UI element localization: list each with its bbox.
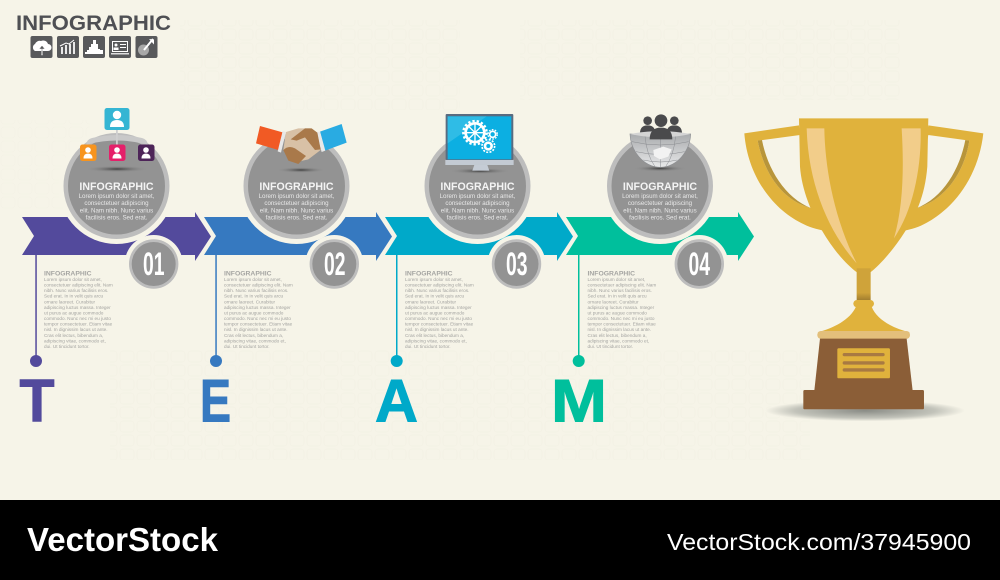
text block 3: adipiscing luctus massa. Integer <box>405 305 472 310</box>
panel: step 3 circle: consectetuer adipiscing <box>445 200 510 207</box>
text block 4: Cras elit lectus, bibendum a, <box>588 333 647 338</box>
text block 1: nisl. In dignissim lacus ut ante. <box>44 327 108 332</box>
text block 4: tempor consectetuer. Etiam vitae <box>588 322 656 327</box>
panel: step 2 circle: consectetuer adipiscing <box>264 200 329 207</box>
name plate <box>837 348 890 378</box>
trophy stem <box>857 268 871 301</box>
text block 2: Sed erat. In in velit quis arcu <box>224 294 284 299</box>
text block 1: nibh. Nunc varius facilisis eros. <box>44 288 108 293</box>
text block 3: Cras elit lectus, bibendum a, <box>405 333 464 338</box>
arrow 3 cyan <box>385 212 573 261</box>
number badge 04 <box>670 235 728 293</box>
text block 2: nibh. Nunc varius facilisis eros. <box>224 288 288 293</box>
number badge 01: 01 <box>143 246 164 282</box>
panel: step 1 circle: elit. Nam nibh. Nunc varius <box>80 208 153 214</box>
panel: step 4 circle: consectetuer adipiscing <box>628 200 693 207</box>
text block 4: adipiscing vitae, commodo et, <box>588 338 649 343</box>
text block 4: Lorem ipsum dolor sit amet, <box>588 277 645 282</box>
panel: step 2 circle: Lorem ipsum dolor sit amet, <box>259 193 335 200</box>
text block 2: INFOGRAPHIC <box>224 270 272 278</box>
arrow 1 purple <box>22 212 211 261</box>
footer bar <box>0 500 1000 580</box>
text block 2: Cras elit lectus, bibendum a, <box>224 333 283 338</box>
text block 4: dui. Ut tincidunt tortor. <box>588 344 633 349</box>
panel: step 2 circle: facilisis eros. Sed erat. <box>266 214 328 222</box>
trophy handles <box>744 125 983 231</box>
panel: step 3 circle: INFOGRAPHIC <box>440 181 515 193</box>
panel: step 1 circle: facilisis eros. Sed erat. <box>86 214 148 222</box>
text block 2: dui. Ut tincidunt tortor. <box>224 344 270 349</box>
panel: step 4 circle: INFOGRAPHIC <box>623 181 697 193</box>
text block 4: commodo. Nunc nec mi eu justo <box>588 316 655 321</box>
text block 2: commodo. Nunc nec mi eu justo <box>224 316 291 321</box>
arrow 4 teal <box>566 212 754 261</box>
connector line and dot 2 <box>210 255 222 367</box>
number badge 02: 02 <box>324 246 346 282</box>
text block 3: Sed erat. In in velit quis arcu <box>405 294 465 299</box>
panel: step 4 circle <box>602 128 718 244</box>
icon: presentation board <box>109 36 131 58</box>
icon: monitor with gears <box>445 114 514 171</box>
text block 1: ut purus ac augue commodo <box>44 310 104 315</box>
text block 3: dui. Ut tincidunt tortor. <box>405 344 451 349</box>
number badge 03 <box>488 235 546 293</box>
text block 4 <box>588 270 656 349</box>
header icon row <box>30 36 158 58</box>
trophy plinth <box>814 339 913 391</box>
cup highlights <box>807 128 921 263</box>
letter T: T <box>20 368 54 434</box>
panel: step 2 circle: elit. Nam nibh. Nunc varius <box>260 208 333 214</box>
text block 4: ut purus ac augue commodo <box>588 310 647 315</box>
text block 1: dui. Ut tincidunt tortor. <box>44 344 90 349</box>
text block 3 <box>405 270 474 349</box>
text block 1: Sed erat. In in velit quis arcu <box>44 294 104 299</box>
panel: step 2 circle <box>238 128 354 244</box>
text block 1: Cras elit lectus, bibendum a, <box>44 333 103 338</box>
number badge 02 <box>305 235 363 293</box>
connector line and dot 4 <box>573 255 585 367</box>
icon: bar chart <box>83 36 105 58</box>
footer url: VectorStock.com/37945900 <box>667 529 971 555</box>
panel: step 3 circle <box>420 128 536 244</box>
text block 4: nibh. Nunc varius facilisis eros. <box>588 288 652 293</box>
connector line and dot 3 <box>391 255 403 367</box>
panel: step 2 circle: INFOGRAPHIC <box>259 181 334 193</box>
text block 4: consectetuer adipiscing elit. Nam <box>588 283 656 288</box>
text block 3: INFOGRAPHIC <box>405 270 453 278</box>
text block 4: adipiscing luctus massa. Integer <box>588 305 655 310</box>
text block 1: commodo. Nunc nec mi eu justo <box>44 316 111 321</box>
text block 2: tempor consectetuer. Etiam vitae <box>224 322 293 327</box>
trophy foot <box>817 307 910 332</box>
text block 2: nisl. In dignissim lacus ut ante. <box>224 327 288 332</box>
text block 3: Lorem ipsum dolor sit amet, <box>405 277 463 282</box>
trophy shadow <box>765 400 965 421</box>
text block 1: adipiscing vitae, commodo et, <box>44 338 106 343</box>
text block 1: Lorem ipsum dolor sit amet, <box>44 277 102 282</box>
panel: step 1 circle: Lorem ipsum dolor sit amet, <box>79 193 155 200</box>
panel: step 3 circle: facilisis eros. Sed erat. <box>447 214 509 222</box>
panel: step 1 circle: INFOGRAPHIC <box>79 181 154 193</box>
text block 3: nisl. In dignissim lacus ut ante. <box>405 327 469 332</box>
letter A: A <box>375 368 418 434</box>
text block 3: ornare laoreet. Curabitur <box>405 299 457 304</box>
text block 1: adipiscing luctus massa. Integer <box>44 305 111 310</box>
icon: cloud upload <box>30 36 52 58</box>
icon: growth bars <box>57 36 79 58</box>
text block 2: consectetuer adipiscing elit. Nam <box>224 283 293 288</box>
trophy cup <box>799 118 928 273</box>
panel: step 4 circle: elit. Nam nibh. Nunc varius <box>623 208 697 214</box>
number badge 03: 03 <box>506 246 528 282</box>
number badge 04: 04 <box>688 246 710 282</box>
text block 1 <box>44 270 113 349</box>
text block 3: ut purus ac augue commodo <box>405 310 465 315</box>
icon: team on globe bowl <box>630 114 691 167</box>
text block 3: consectetuer adipiscing elit. Nam <box>405 283 474 288</box>
text block 1: ornare laoreet. Curabitur <box>44 299 96 304</box>
icon: handshake <box>256 124 347 164</box>
text block 2: Lorem ipsum dolor sit amet, <box>224 277 282 282</box>
trophy base <box>803 390 924 409</box>
text block 4: ornare laoreet. Curabitur <box>588 299 639 304</box>
letter E: E <box>200 368 231 434</box>
text block 2: adipiscing vitae, commodo et, <box>224 338 286 343</box>
text block 2: ornare laoreet. Curabitur <box>224 299 276 304</box>
text block 1: INFOGRAPHIC <box>44 270 92 278</box>
text block 4: nisl. In dignissim lacus ut ante. <box>588 327 651 332</box>
panel: step 3 circle: elit. Nam nibh. Nunc varius <box>441 208 514 214</box>
panel: step 4 circle: facilisis eros. Sed erat. <box>629 214 691 222</box>
text block 4: INFOGRAPHIC <box>588 270 635 278</box>
panel: step 1 circle: consectetuer adipiscing <box>84 200 149 207</box>
text block 3: adipiscing vitae, commodo et, <box>405 338 467 343</box>
footer logo: VectorStock <box>27 521 219 558</box>
panel: step 1 circle <box>58 128 174 244</box>
letter M: M <box>551 368 607 434</box>
text block 4: Sed erat. In in velit quis arcu <box>588 294 647 299</box>
icon: target <box>136 36 158 58</box>
text block 1: consectetuer adipiscing elit. Nam <box>44 283 113 288</box>
trophy <box>744 118 983 421</box>
text block 3: nibh. Nunc varius facilisis eros. <box>405 288 469 293</box>
text block 3: tempor consectetuer. Etiam vitae <box>405 322 474 327</box>
text block 2: adipiscing luctus massa. Integer <box>224 305 291 310</box>
text block 2 <box>224 270 293 349</box>
panel: step 3 circle: Lorem ipsum dolor sit amet, <box>440 193 516 200</box>
text block 2: ut purus ac augue commodo <box>224 310 284 315</box>
panel: step 4 circle: Lorem ipsum dolor sit amet, <box>622 193 698 200</box>
text block 1: tempor consectetuer. Etiam vitae <box>44 322 113 327</box>
connector line and dot 1 <box>30 255 42 367</box>
icon: org chart <box>80 108 154 161</box>
number badge 01 <box>125 235 183 293</box>
arrow 2 blue <box>204 212 392 261</box>
header title: INFOGRAPHIC <box>16 12 171 35</box>
text block 3: commodo. Nunc nec mi eu justo <box>405 316 472 321</box>
